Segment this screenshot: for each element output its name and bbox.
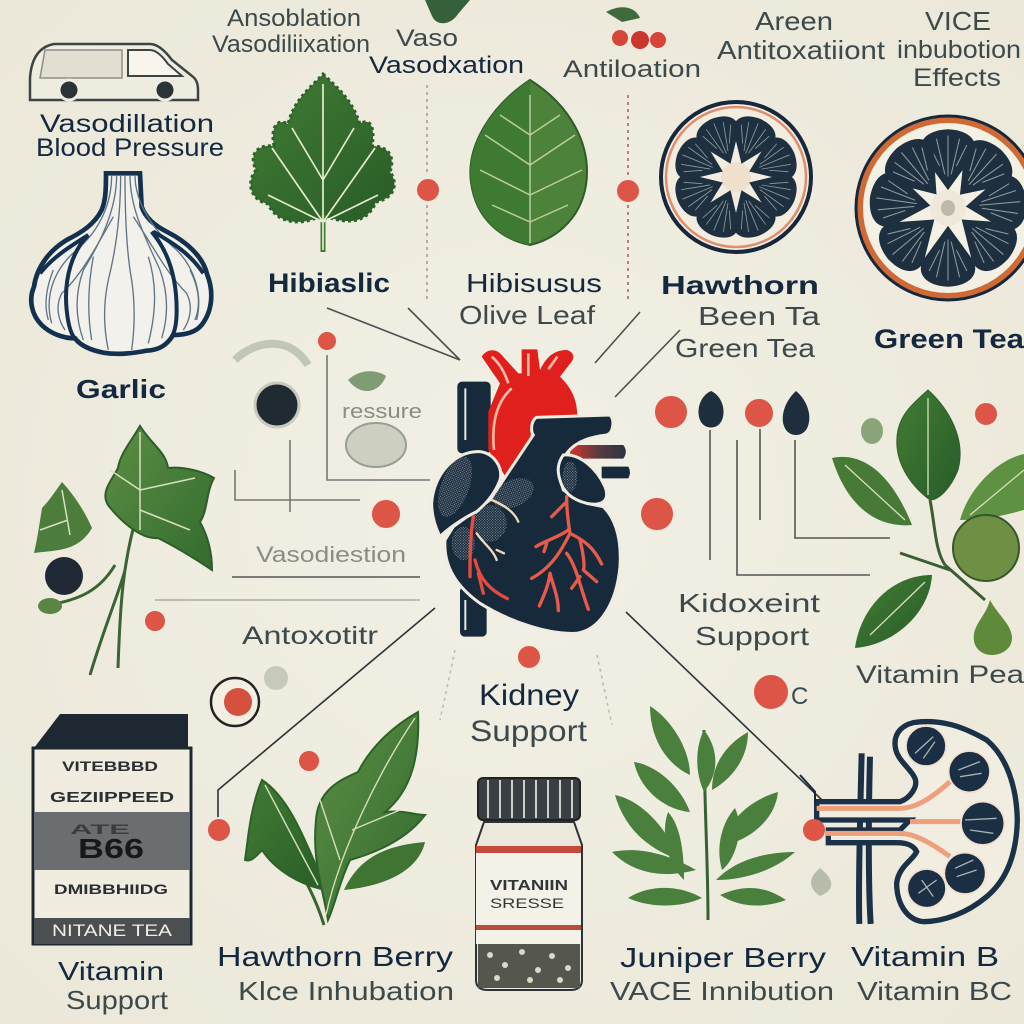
labels: bottom row: VACE Innibution (610, 976, 834, 1006)
label: kidney support center: Kidney (479, 679, 579, 712)
label: hawthorn been green tea: Hawthorn (661, 270, 819, 300)
top labels: Ansoblation (227, 5, 361, 32)
label: vitamin support: Support (66, 985, 169, 1015)
labels: bottom row: Vitamin BC (857, 976, 1012, 1006)
top labels: Antitoxatiiont (717, 35, 886, 65)
labels: bottom row (217, 941, 1012, 1006)
icon: hawthorn sprig (245, 712, 425, 925)
markers: red dots (144, 178, 998, 842)
middle-left faint diagram: Vasodiestion (256, 542, 406, 567)
labels: bottom row: Juniper Berry (620, 942, 826, 973)
label: kidney support center (470, 679, 588, 748)
icon: vitamin box: DMIBBHIIDG (54, 881, 168, 897)
icon: van (30, 44, 198, 100)
icon: vitamin box: B66 (78, 833, 144, 864)
icon: citrus slice large (856, 116, 1024, 300)
label: hibiscus olive leaf (459, 268, 602, 330)
top labels: Effects (913, 64, 1001, 92)
icon: vine with leaves left (34, 426, 214, 675)
icon: vitamin box: NITANE TEA (52, 921, 173, 940)
icon: citrus slice small (661, 102, 811, 252)
labels: bottom row: Hawthorn Berry (217, 941, 453, 972)
icon: garlic (31, 173, 211, 354)
label: hawthorn been green tea: Been Ta (698, 301, 821, 331)
markers: kidney red dot and drop (803, 819, 831, 896)
icon: vitamin box (33, 714, 191, 944)
middle-left faint diagram (211, 344, 422, 726)
top labels: Vasodxation (369, 52, 524, 79)
icon: vitamin bottle (476, 778, 582, 990)
label: garlic: Garlic (76, 374, 166, 404)
labels: kidney support right (678, 588, 1024, 710)
connector lines (155, 85, 890, 830)
top labels: VICE (925, 6, 991, 36)
icons: dark drops (698, 391, 809, 435)
labels: bottom row: Vitamin B (851, 941, 999, 972)
label: kidney support center: Support (470, 715, 588, 748)
icon: vitamin box: ATE (70, 821, 130, 837)
label: hibiscus olive leaf: Olive Leaf (459, 300, 596, 330)
top labels: Vasodiliixation (212, 31, 370, 58)
label: vitamin support: Vitamin (58, 956, 164, 986)
icon: vitamin box: VITEBBBD (62, 758, 158, 774)
icon: plant right (832, 390, 1024, 655)
label: hibiscus: Hibiaslic (268, 268, 390, 298)
top labels: inbubotion (897, 36, 1021, 64)
icon: kidney diagram (800, 722, 1017, 924)
labels: kidney support right: C (791, 683, 808, 710)
icon: heart (431, 349, 630, 637)
icon: vitamin bottle: VITANIIN (490, 877, 568, 894)
label: hibiscus olive leaf: Hibisusus (466, 268, 602, 298)
labels: kidney support right: Support (695, 621, 810, 651)
label: green tea: Green Tea (874, 324, 1024, 354)
top labels: Vaso (396, 25, 458, 52)
label: antioxidant: Antoxotitr (242, 622, 378, 650)
top labels: Antiloation (563, 56, 701, 83)
small top icons (425, 0, 666, 49)
labels: bottom row: Klce Inhubation (238, 976, 454, 1006)
top labels (212, 5, 1021, 92)
label: hawthorn been green tea (661, 270, 821, 363)
middle-left faint diagram: ressure (342, 401, 422, 423)
heading: vasodilation blood pressure: Vasodillation (40, 110, 214, 138)
icon: vitamin box: GEZIIPPEED (50, 789, 174, 806)
label: hawthorn been green tea: Green Tea (675, 333, 816, 363)
icon: vitamin bottle: SRESSE (490, 895, 564, 911)
heading: vasodilation blood pressure (36, 110, 224, 162)
heading: vasodilation blood pressure: Blood Pressure (36, 134, 224, 162)
icon: hibiscus leaf (251, 74, 394, 252)
labels: kidney support right: Vitamin Pea (856, 661, 1024, 689)
icon: olive leaf (470, 80, 587, 245)
labels: kidney support right: Kidoxeint (678, 588, 821, 618)
label: vitamin support (58, 956, 169, 1015)
icon: juniper sprig (612, 706, 795, 920)
top labels: Areen (755, 6, 833, 36)
